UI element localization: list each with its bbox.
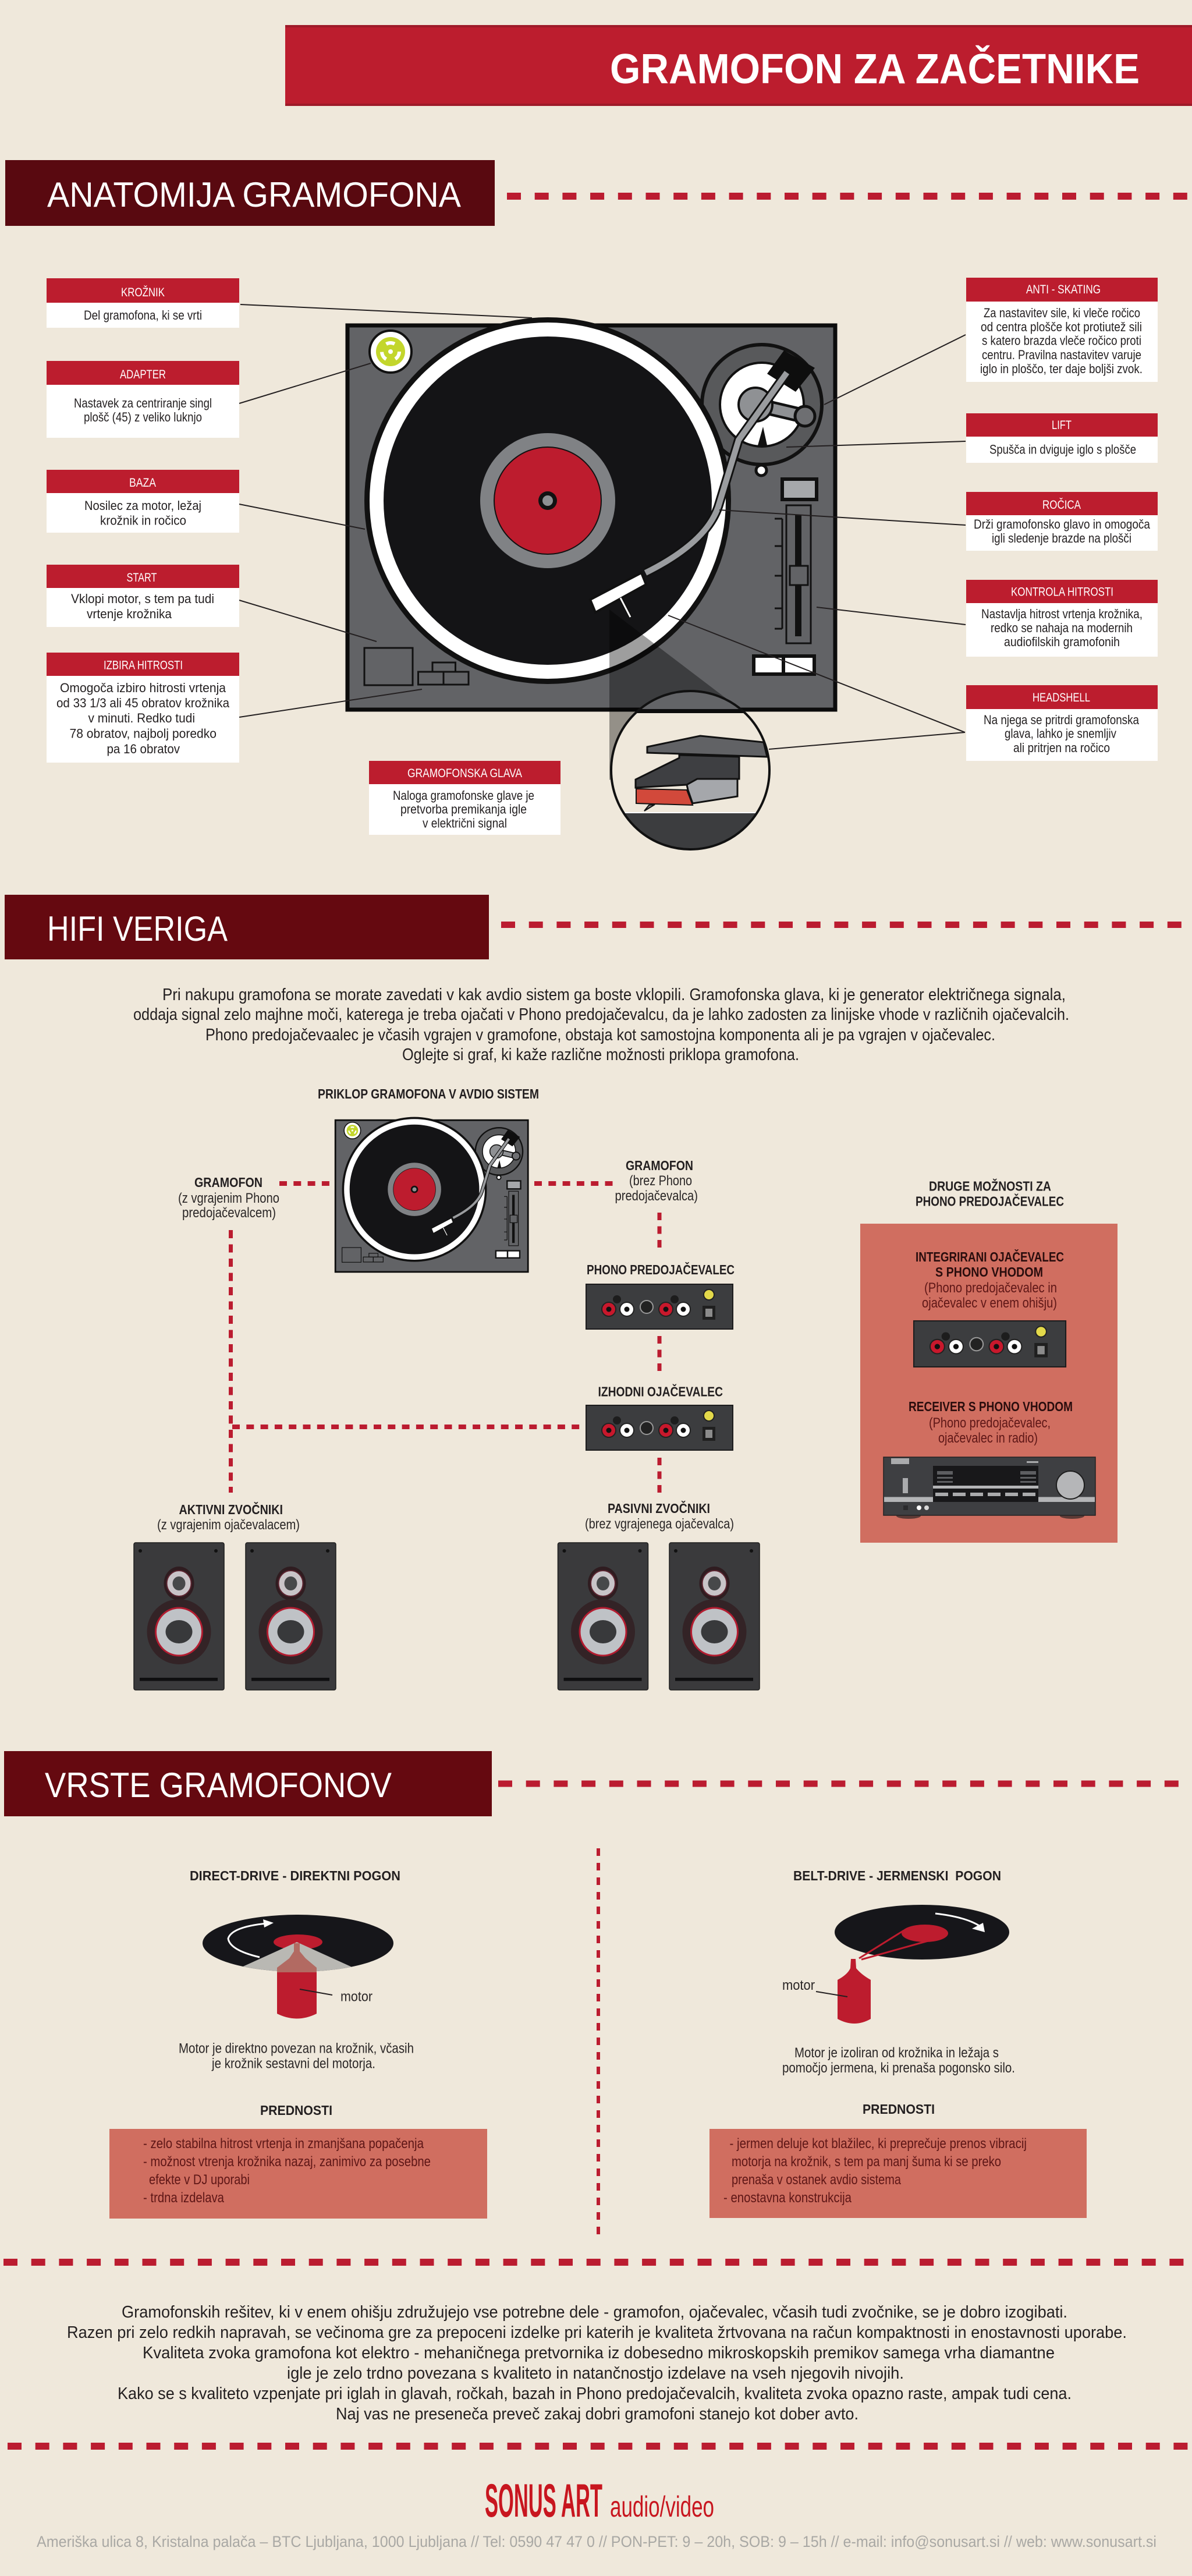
callout: start: vrtenje krožnika [87,607,172,621]
intro text: Oglejte si graf, ki kaže različne možnosti priklopa gramofona. [402,1046,799,1064]
callout: anti-skating: s katero brazda vleče ročico proti [982,333,1141,348]
callout: anti-skating [966,278,1158,382]
closing text: igle je zelo trdno povezana s kvaliteto in natančnostjo izdelave na vseh njegovih nivojih. [287,2364,904,2383]
description: Motor je izoliran od krožnika in ležaja s [794,2045,999,2061]
advantages box: - jermen deluje kot blažilec, ki preprečuje prenos vibracij [730,2136,1027,2152]
callout: anti-skating: centru. Pravilna nastavitev varuje [982,348,1141,362]
divider top of closing text [3,2259,1192,2266]
callout: baza: krožnik in ročico [100,513,186,527]
advantages box: - enostavna konstrukcija [723,2190,852,2206]
label: gramofon z vgrajenim: predojačevalcem) [182,1205,276,1221]
active speakers: AKTIVNI ZVOČNIKI [179,1501,283,1517]
callout: baza: BAZA [129,476,156,490]
callout: izbira hitrosti: pa 16 obratov [107,742,180,756]
callout: gramofonska glava [369,761,560,835]
heading: BELT-DRIVE - JERMENSKI POGON [793,1868,1001,1883]
description: pomočjo jermena, ki prenaša pogonsko silo. [782,2060,1015,2076]
callout: gramofonska glava: GRAMOFONSKA GLAVA [407,767,522,780]
description: Motor je direktno povezan na krožnik, včasih [179,2041,414,2056]
callout: izbira hitrosti: 78 obratov, najbolj poredko [70,727,217,740]
callout: kontrola hitrosti: Nastavlja hitrost vrtenja krožnika, [981,607,1143,621]
callout: anti-skating: Za nastavitev sile, ki vleče ročico [984,306,1140,320]
description: je krožnik sestavni del motorja. [211,2056,375,2071]
phono preamp [586,1262,735,1329]
adapter [370,331,411,373]
callout: krožnik: KROŽNIK [121,286,165,299]
callout: izbira hitrosti: IZBIRA HITROSTI [104,659,183,672]
description [782,2045,1015,2076]
closing text: Kako se s kvaliteto vzpenjate pri iglah in glavah, ročkah, bazah in Phono predojačevalcih, kvaliteta zvoka opazno raste, ampak tudi cena. [118,2384,1072,2403]
callout: headshell: Na njega se pritrdi gramofonska [984,713,1140,727]
label: gramofon brez [615,1158,698,1204]
callout: anti-skating: od centra plošče kot protiutež sili [981,320,1142,334]
output amplifier [586,1383,733,1450]
callout: ročica: Drži gramofonsko glavo in omogoča [974,517,1151,532]
receiver: ojačevalec in radio) [938,1430,1038,1446]
title: GRAMOFON ZA ZAČETNIKE [610,45,1140,93]
advantages box [109,2129,487,2219]
callout: ročica [966,492,1158,551]
integrated amplifier: S PHONO VHODOM [935,1264,1043,1280]
advantages box: - zelo stabilna hitrost vrtenja in zmanjšana popačenja [143,2136,424,2152]
label: gramofon brez: predojačevalca) [615,1188,698,1204]
callout: lift [966,413,1158,463]
tonearm [590,350,815,617]
passive speakers: PASIVNI ZVOČNIKI [608,1500,710,1516]
advantages box: motorja na krožnik, s tem pa manj šuma ki se preko [732,2154,1001,2170]
callout: gramofonska glava: Naloga gramofonske glave je [393,788,534,803]
intro text: Pri nakupu gramofona se morate zavedati v kak avdio sistem ga boste vklopili. Gramofonska glava, ki je generator električnega signala, [162,986,1066,1004]
passive speakers: (brez vgrajenega ojačevalca) [585,1516,734,1532]
callout: adapter: ADAPTER [120,368,166,381]
callout: izbira hitrosti [47,653,239,763]
tonearm mount [702,345,822,476]
illustration: belt drive: motor [782,1978,815,1993]
callout: adapter: Nastavek za centriranje singl [74,396,212,410]
panel: other options [860,1224,1118,1543]
magnifier cone [609,610,751,780]
intro text: Phono predojačevaalec je včasih vgrajen v gramofone, obstaja kot samostojna komponenta ali je pa vgrajen v ojačevalec. [205,1026,995,1044]
intro text [133,986,1069,1064]
passive speakers [558,1500,760,1690]
callout: kontrola hitrosti: KONTROLA HITROSTI [1011,586,1113,598]
turntable diagram [347,317,835,710]
callout: anti-skating: iglo in ploščo, ter daje boljši zvok. [980,362,1143,376]
advantages heading: PREDNOSTI [260,2103,332,2118]
callout: kontrola hitrosti: redko se nahaja na modernih [991,621,1133,635]
active speakers [134,1501,336,1690]
illustration: belt drive [782,1905,1009,2024]
callout: start: Vklopi motor, s tem pa tudi [71,591,214,606]
callout: gramofonska glava: v električni signal [423,816,507,830]
callout: krožnik [47,278,239,328]
integrated amplifier: INTEGRIRANI OJAČEVALEC [916,1249,1064,1264]
label: gramofon brez: (brez Phono [629,1173,692,1189]
label: gramofon z vgrajenim: GRAMOFON [194,1175,262,1190]
closing text: Kvaliteta zvoka gramofona kot elektro - mehaničnega pretvornika iz dobesedno mikroskopskih premikov samega vrha diamantne [143,2344,1055,2362]
advantages box: - možnost vtrenja krožnika nazaj, zanimivo za posebne [143,2154,431,2170]
advantages box: - trdna izdelava [143,2190,225,2206]
callout: headshell [966,685,1158,761]
callout: adapter: plošč (45) z veliko luknjo [84,410,202,424]
callout: adapter [47,361,239,438]
integrated amplifier: ojačevalec v enem ohišju) [922,1295,1057,1311]
active speakers: (z vgrajenim ojačevalacem) [157,1517,300,1533]
section heading: vrste gramofonov: VRSTE GRAMOFONOV [45,1766,392,1805]
callout: ročica: ROČICA [1042,498,1081,512]
advantages box: efekte v DJ uporabi [149,2172,250,2188]
panel: belt drive [709,1868,1087,2218]
callout: lift: LIFT [1052,419,1072,432]
integrated amplifier: (Phono predojačevalec in [924,1280,1057,1296]
platter and record [364,317,731,684]
receiver: (Phono predojačevalec, [929,1415,1051,1431]
callout: headshell: glava, lahko je snemljiv [1005,727,1116,740]
section heading: hifi veriga [5,895,1192,959]
section heading: anatomija: ANATOMIJA GRAMOFONA [47,175,461,214]
title banner [285,25,1192,106]
label: gramofon z vgrajenim [178,1175,279,1221]
divider above logo [8,2443,1192,2450]
chart heading: PRIKLOP GRAMOFONA V AVDIO SISTEM [318,1086,539,1101]
callout: gramofonska glava: pretvorba premikanja igle [400,802,527,816]
advantages box [709,2129,1087,2218]
output amplifier: IZHODNI OJAČEVALEC [598,1383,723,1399]
small turntable [335,1117,528,1272]
cartridge magnifier [610,690,771,851]
closing text [67,2303,1127,2423]
advantages box: prenaša v ostanek avdio sistema [732,2172,902,2188]
closing text: Gramofonskih rešitev, ki v enem ohišju združujejo vse potrebne dele - gramofon, ojačevalec, včasih tudi zvočnike, se je dobro izogibati. [122,2303,1067,2322]
callout: kontrola hitrosti [966,580,1158,657]
callout: kontrola hitrosti: audiofilskih gramofonih [1004,635,1120,649]
callout: headshell: ali pritrjen na ročico [1013,740,1110,755]
label: gramofon brez: GRAMOFON [626,1158,693,1173]
callout: ročica: igli sledenje brazde na plošči [992,531,1131,545]
label: gramofon z vgrajenim: (z vgrajenim Phono [178,1190,279,1206]
description [179,2041,414,2071]
closing text: Naj vas ne preseneča preveč zakaj dobri gramofoni stanejo kot dober avto. [336,2405,858,2423]
receiver [884,1399,1095,1519]
illustration: direct drive: motor [340,1989,372,2005]
logo: audio/video [610,2490,714,2523]
start and speed buttons [364,648,469,685]
integrated amplifier [914,1249,1066,1367]
other options heading: PHONO PREDOJAČEVALEC [916,1193,1064,1209]
other options heading [916,1178,1064,1209]
callout: start [47,565,239,627]
callout: headshell: HEADSHELL [1033,691,1090,704]
logo: SONUS ART [485,2475,602,2527]
section heading: vrste gramofonov [4,1751,1192,1816]
section heading: anatomija [5,160,1192,226]
callout: lift: Spušča in dviguje iglo s plošče [989,442,1136,456]
connection lines [230,1184,659,1493]
turntable base [347,325,835,710]
column divider [597,1848,600,2234]
callout: izbira hitrosti: od 33 1/3 ali 45 obratov krožnika [56,696,230,710]
closing text: Razen pri zelo redkih napravah, se večinoma gre za prepoceni izdelke pri katerih je kvaliteta žrtvovana na račun kompaktnosti in enostavnosti uporabe. [67,2323,1127,2342]
callout: krožnik: Del gramofona, ki se vrti [84,308,202,323]
other options heading: DRUGE MOŽNOSTI ZA [929,1178,1051,1193]
callout: baza: Nosilec za motor, ležaj [84,498,201,513]
section heading: hifi veriga: HIFI VERIGA [47,909,228,948]
callout: izbira hitrosti: Omogoča izbiro hitrosti vrtenja [60,681,226,695]
panel: direct drive [109,1868,487,2219]
advantages heading: PREDNOSTI [863,2102,935,2117]
leader lines [239,304,966,749]
pitch control [754,479,817,674]
illustration: direct drive [203,1915,393,2019]
callout: anti-skating: ANTI - SKATING [1026,283,1101,296]
intro text: oddaja signal zelo majhne moči, katerega je treba ojačati v Phono predojačevalcu, da je lahko zadosten za linijske vhode v različnih ojačevalcih. [133,1005,1069,1024]
callout: baza [47,470,239,533]
receiver: RECEIVER S PHONO VHODOM [909,1399,1073,1414]
callout: start: START [127,571,157,584]
phono preamp: PHONO PREDOJAČEVALEC [587,1262,735,1277]
callout: izbira hitrosti: v minuti. Redko tudi [88,711,195,725]
heading: DIRECT-DRIVE - DIREKTNI POGON [190,1868,400,1883]
